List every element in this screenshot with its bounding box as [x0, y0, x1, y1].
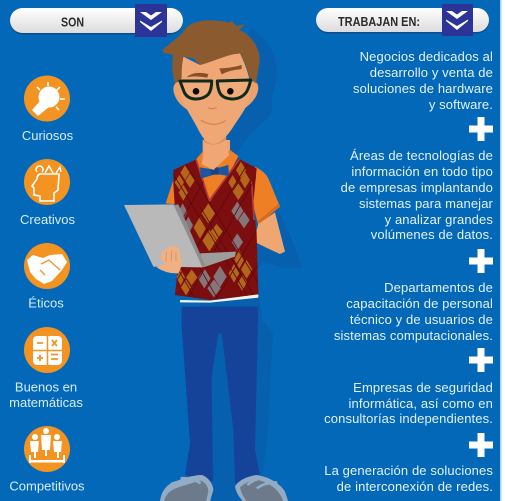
arm and pointing hand — [205, 212, 285, 254]
legs — [160, 307, 288, 501]
torso — [124, 140, 285, 317]
text block: redes: La generación de soluciones — [324, 463, 493, 478]
text block: seguridad — [324, 380, 493, 426]
text block: negocios: Negocios dedicados al — [360, 49, 493, 64]
trait: Buenos en matematicas: Buenos en — [15, 380, 77, 394]
shirt — [196, 150, 238, 203]
head — [162, 20, 260, 170]
icon: plus — [469, 433, 493, 457]
trait: Competitivos: Competitivos — [9, 478, 85, 494]
trait: Eticos: Éticos — [28, 296, 64, 310]
icon: plus — [469, 249, 493, 273]
trait: Curiosos: Curiosos — [22, 128, 74, 143]
text block: redes — [324, 463, 493, 494]
text block: negocios — [353, 49, 493, 112]
text block: redes: de interconexión de redes. — [337, 479, 493, 494]
heading: SON: SON — [61, 14, 84, 30]
text block: seguridad: Empresas de seguridad — [353, 380, 493, 395]
laptop — [124, 204, 236, 267]
text block: areas de tecnologias — [341, 148, 494, 242]
neck — [202, 132, 229, 170]
bow tie — [200, 165, 229, 179]
face — [180, 53, 251, 144]
argyle pattern — [173, 162, 258, 300]
icon: people on podium — [24, 426, 70, 472]
eyes — [193, 88, 199, 95]
trait: Buenos en matematicas — [9, 327, 83, 410]
vest hem — [180, 294, 258, 303]
nose and smile — [201, 107, 226, 124]
icon: double chevron — [442, 4, 473, 36]
text block: departamentos: técnico y de usuarios de — [350, 312, 493, 327]
text block: areas de tecnologias: sistemas para manejar — [359, 196, 494, 211]
icon: handshake — [24, 243, 70, 289]
text block: areas de tecnologias: volúmenes de datos. — [371, 227, 493, 242]
icon: plus — [469, 117, 493, 141]
hair — [162, 20, 260, 83]
text block: departamentos: Departamentos de — [384, 280, 493, 295]
figure: student with laptop — [124, 20, 302, 501]
header pill: SON — [10, 4, 183, 37]
icon: double chevron — [135, 4, 167, 37]
text block: areas de tecnologias: de empresas implantando — [341, 180, 493, 195]
text block: seguridad: consultorías independientes. — [324, 411, 493, 426]
left shoe — [160, 475, 213, 501]
text block: areas de tecnologias: y analizar grandes — [385, 212, 493, 227]
text block: areas de tecnologias: Áreas de tecnologías de — [350, 148, 493, 163]
eyebrows — [187, 65, 242, 78]
trait: Creativos — [20, 159, 75, 227]
text block: negocios: desarrollo y venta de — [370, 65, 493, 80]
text block: departamentos: capacitación de personal — [346, 296, 493, 311]
icon: calculator — [24, 327, 70, 373]
text block: negocios: y software. — [429, 97, 493, 112]
trait: Curiosos — [22, 76, 74, 143]
glasses — [180, 80, 251, 99]
text block: seguridad: informática, así como en — [348, 396, 493, 411]
header pill: TRABAJAN EN — [316, 4, 489, 36]
icon: creative head — [24, 159, 70, 205]
trait: Creativos: Creativos — [20, 212, 75, 227]
icon: light bulb — [24, 76, 70, 122]
text block: negocios: soluciones de hardware — [353, 81, 493, 96]
icon: plus — [469, 348, 493, 372]
trait: Competitivos — [9, 426, 85, 494]
text block: departamentos — [334, 280, 493, 343]
heading: TRABAJAN EN: TRABAJAN EN: — [338, 14, 420, 29]
trait: Buenos en matematicas: matemáticas — [9, 395, 83, 410]
text block: areas de tecnologias: información en todo tipo — [351, 164, 493, 179]
right shoe — [235, 475, 288, 501]
text block: departamentos: sistemas computacionales. — [334, 328, 493, 343]
neck — [203, 140, 230, 167]
holding hand — [157, 246, 182, 273]
ears — [173, 82, 190, 109]
figure shadow — [200, 28, 302, 501]
trait: Eticos — [24, 243, 70, 310]
vest — [173, 158, 258, 300]
